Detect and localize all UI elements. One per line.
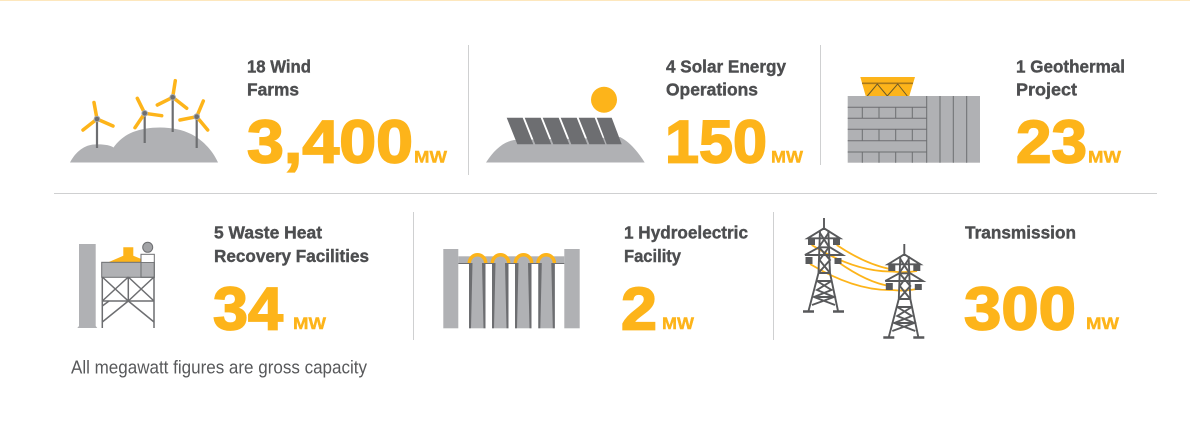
- icon: wind farm: [70, 81, 218, 162]
- value: 2 MW: MW: [662, 315, 694, 333]
- heading: hydroelectric: 1 Hydroelectric: [624, 222, 748, 242]
- heading: hydroelectric: Facility: [624, 246, 681, 266]
- heading: wind farms: 18 Wind: [247, 56, 311, 76]
- footnote: All megawatt figures are gross capacity: [71, 358, 367, 378]
- value: 2 MW: [621, 276, 694, 342]
- heading: solar: Operations: [666, 80, 758, 100]
- value: 150 MW: MW: [771, 148, 803, 166]
- value: 34 MW: [213, 276, 326, 342]
- heading: geothermal: 1 Geothermal: [1016, 56, 1125, 76]
- heading: waste heat: Recovery Facilities: [214, 246, 369, 266]
- value: 300 MW: [964, 276, 1119, 342]
- value: 3,400 MW: MW: [414, 148, 447, 166]
- value: 23 MW: MW: [1088, 148, 1121, 166]
- heading: transmission: Transmission: [965, 222, 1076, 242]
- value: 34 MW: MW: [293, 315, 326, 333]
- value: 2 MW: 2: [621, 276, 657, 342]
- value: 23 MW: 23: [1016, 108, 1087, 176]
- heading: geothermal: Project: [1016, 80, 1077, 100]
- heading: wind farms: Farms: [247, 80, 299, 100]
- heading: solar: 4 Solar Energy: [666, 56, 786, 76]
- icon: transmission towers: [803, 218, 924, 338]
- heading: waste heat: 5 Waste Heat: [214, 222, 322, 242]
- icon: solar panels and sun: [486, 87, 645, 162]
- icon: hydroelectric dam: [443, 249, 580, 328]
- value: 300 MW: MW: [1086, 315, 1119, 333]
- value: 300 MW: 300: [964, 276, 1076, 342]
- value: 3,400 MW: 3,400: [247, 108, 413, 176]
- icon: waste heat facility: [77, 242, 154, 328]
- value: 34 MW: 34: [213, 276, 284, 342]
- icon: geothermal plant: [848, 77, 980, 163]
- value: 150 MW: 150: [665, 108, 767, 176]
- value: 23 MW: [1016, 108, 1121, 176]
